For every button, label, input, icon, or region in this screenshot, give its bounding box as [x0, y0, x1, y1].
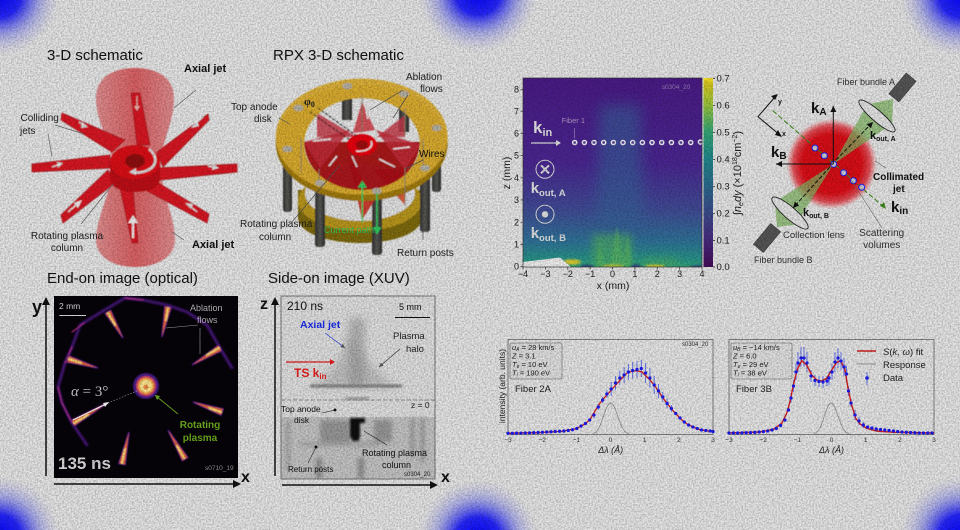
chart: Fiber 3B spectrum: = 29 eV	[740, 360, 769, 369]
labels: RPX schematic: φ	[304, 96, 311, 108]
chart: Fiber 3B spectrum: Fiber 3B	[736, 384, 772, 395]
chart: Fiber 2A spectrum: i	[517, 372, 519, 378]
tick labels: 0	[830, 437, 834, 444]
chart: Fiber 2A spectrum: = 190 eV	[518, 368, 550, 378]
axis tick labels: 0.0	[716, 262, 730, 273]
heatmap annotations: in	[542, 127, 553, 139]
lower cathode cup	[298, 190, 422, 243]
horizontal band	[310, 384, 402, 388]
chart: Fiber 3B spectrum: i	[738, 372, 740, 378]
geometry labels: y	[778, 99, 782, 106]
plot frame	[508, 340, 713, 434]
anode ring glow	[58, 298, 232, 445]
axis tick labels: 0.2	[716, 209, 730, 220]
labels: RPX schematic: disk	[254, 114, 273, 125]
legend: Data	[883, 373, 904, 384]
axis tick labels: 0	[514, 262, 519, 272]
response curve	[814, 403, 849, 434]
panel: side-on image: s0304_20	[404, 472, 431, 478]
panel: end-on image: α = 3°	[71, 384, 108, 400]
panel: end-on image: Rotating	[180, 420, 220, 431]
axis tick labels: 3	[677, 269, 682, 279]
tick labels: 1	[864, 437, 868, 444]
response curve	[593, 403, 629, 434]
heatmap annotations	[531, 118, 566, 244]
jet arrows	[52, 96, 219, 238]
axis frame and ticks	[520, 78, 715, 270]
collection cones	[775, 99, 893, 227]
collimated jet cross-section	[788, 120, 876, 208]
labels: RPX schematic: Wires	[419, 149, 445, 160]
heatmap annotations: out, A	[539, 188, 566, 199]
radial wire jets	[32, 93, 237, 243]
yellow base hot spots	[563, 260, 665, 268]
axis tick labels: 3	[514, 195, 519, 205]
labels: 3-D schematic	[19, 63, 235, 254]
lower dark region	[281, 417, 435, 479]
chart: density heatmap: z (mm)	[501, 157, 513, 189]
chart: density heatmap: (×10	[732, 165, 744, 187]
panel: side-on image: 5 mm	[399, 302, 422, 312]
image frame	[281, 296, 435, 479]
axis tick labels: 2	[655, 269, 660, 279]
labels: 3-D schematic: Rotating plasma	[31, 231, 104, 242]
axis tick labels: 1	[632, 269, 637, 279]
geometry labels: k	[771, 144, 779, 161]
tick labels: −2	[538, 437, 546, 444]
geometry labels: A	[819, 107, 827, 118]
axis tick labels: −1	[585, 269, 595, 279]
black image frame	[54, 296, 238, 478]
chart: density heatmap: Fiber 1	[562, 116, 585, 125]
axis tick labels: 8	[514, 84, 519, 94]
panel: end-on image: plasma	[183, 433, 218, 444]
labels: 3-D schematic: Colliding	[20, 113, 59, 124]
error bars	[594, 360, 671, 418]
chart: Fiber 2A spectrum: = 28 km/s	[520, 343, 555, 352]
labels: 3-D schematic: jets	[19, 126, 36, 137]
axis tick labels: 0.7	[716, 74, 730, 85]
tick labels: −3	[725, 437, 733, 444]
central rotating plasma	[133, 373, 159, 399]
ablation flow blades	[304, 102, 420, 220]
data points	[508, 368, 713, 433]
panel: side-on image: halo	[406, 344, 424, 355]
axes: end-on image	[32, 297, 250, 488]
current path arrows	[359, 182, 380, 233]
geometry labels: Collimated	[873, 172, 924, 183]
chart: Fiber 3B spectrum: Z = 6.0	[732, 352, 757, 360]
dark central column	[350, 418, 365, 441]
chart: density heatmap: dy	[732, 189, 744, 202]
heatmap annotations: k	[531, 225, 539, 242]
chart: density heatmap: −2	[732, 134, 739, 143]
labels: RPX schematic: flows	[420, 84, 443, 95]
heatmap annotations: k	[531, 180, 539, 197]
geometry labels: B	[779, 151, 787, 162]
legend: S(k, ω) fit	[883, 347, 924, 358]
panel: end-on image: 135 ns	[58, 454, 111, 473]
panel: end-on image	[54, 296, 238, 478]
chart: Fiber 3B spectrum	[725, 340, 936, 455]
axis tick labels: 0	[610, 269, 615, 279]
panel: side-on image: disk	[294, 415, 310, 425]
chart: density heatmap: s0304_20	[662, 84, 691, 91]
fit curve	[508, 371, 713, 433]
ablation flames	[67, 306, 223, 465]
panel: scattering geometry schematic: volumes	[863, 240, 900, 251]
labels: 3-D schematic: Axial jet	[192, 239, 235, 251]
panel: end-on image: s0710_19	[205, 465, 234, 472]
chart: Fiber 2A spectrum: intensity (arb. units)	[497, 349, 507, 423]
labels: 3-D schematic: column	[51, 243, 83, 254]
panel: side-on image: column	[382, 460, 411, 470]
geometry labels: k	[811, 100, 819, 117]
chart: Fiber 3B spectrum: e	[738, 364, 741, 370]
tick labels	[725, 437, 936, 444]
tick labels: −2	[759, 437, 767, 444]
axis title: Δλ (Å)	[818, 445, 844, 455]
geometry labels: in	[899, 206, 908, 217]
panel: side-on image: TS k	[294, 366, 319, 380]
chart: Fiber 2A spectrum: T	[512, 368, 519, 378]
axial jet hourglass	[96, 68, 175, 267]
fiber bundle B	[753, 223, 781, 253]
geometry labels: k	[870, 130, 876, 142]
chart: Fiber 2A spectrum: T	[512, 360, 520, 370]
geometry labels: x	[782, 131, 786, 138]
tick labels: 3	[932, 437, 936, 444]
heading: 3-D schematic: 3-D schematic	[47, 47, 143, 64]
labels: 3-D schematic: Axial jet	[184, 63, 227, 75]
parameter box	[731, 343, 792, 379]
wavevector arrows	[758, 95, 873, 208]
axis tick labels	[514, 74, 730, 279]
panel: scattering geometry schematic	[753, 73, 924, 265]
return post bodies	[283, 86, 441, 255]
panel: side-on image: Plasma	[393, 331, 425, 342]
chart: density heatmap: 18	[732, 157, 739, 165]
green streaks near base	[592, 234, 678, 267]
axis tick labels: 0.6	[716, 101, 730, 112]
angle phi0 lines	[310, 108, 358, 140]
axis tick labels: 0.1	[716, 236, 730, 247]
geometry labels: jet	[892, 184, 905, 195]
panel: side-on image: Axial jet	[300, 319, 341, 331]
heatmap annotations: out, B	[539, 233, 566, 244]
axis tick labels: 0.3	[716, 182, 730, 193]
z=0 dashed line	[281, 399, 435, 401]
axis tick labels: 4	[699, 269, 705, 279]
axis tick labels: 6	[514, 128, 519, 138]
chart: density heatmap	[501, 74, 745, 292]
chart: density heatmap: e	[738, 202, 745, 206]
panel: side-on image	[281, 296, 435, 479]
axis tick labels: 4	[514, 173, 519, 183]
labels: RPX schematic: Top anode	[231, 102, 278, 113]
lens A	[856, 96, 898, 136]
panel: side-on image: Return posts	[288, 465, 333, 474]
plot frame	[729, 340, 934, 434]
heading: RPX 3-D schematic: RPX 3-D schematic	[273, 47, 404, 64]
tick labels: −1	[573, 437, 580, 444]
panel: RPX 3-D schematic	[276, 79, 448, 255]
panel: end-on image: Ablation	[190, 303, 223, 313]
chart: Fiber 2A spectrum	[497, 340, 715, 455]
axes: end-on image: x	[241, 469, 250, 486]
axis titles: Δλ (Å)	[597, 445, 623, 455]
central rotating column	[347, 134, 377, 156]
chart: density heatmap: cm	[732, 143, 744, 157]
annotations: 210 ns	[287, 299, 323, 313]
fiber probe points	[573, 140, 703, 145]
axes: side-on image: z	[260, 296, 268, 313]
heatmap field	[523, 78, 706, 270]
chart: Fiber 2A spectrum: e	[517, 364, 520, 370]
panel: scattering geometry schematic: Fiber bundle A	[837, 77, 895, 87]
heading: side-on image: Side-on image (XUV)	[268, 270, 410, 287]
colorbar	[704, 78, 713, 267]
tick labels: 3	[711, 437, 715, 444]
fiber bundle A	[889, 73, 916, 102]
flow arrows	[313, 110, 410, 167]
panel: scattering geometry schematic: Fiber bundle B	[754, 255, 813, 265]
tick labels: 2	[677, 437, 681, 444]
chart: Fiber 2A spectrum: = 10 eV	[519, 360, 548, 369]
panel: end-on image: flows	[197, 315, 218, 325]
axis tick labels: 5	[514, 151, 519, 161]
target shadow	[523, 258, 571, 267]
chart: density heatmap: )	[732, 131, 744, 135]
axis tick labels: 7	[514, 106, 519, 116]
labels: RPX schematic: column	[259, 232, 291, 243]
labels: RPX schematic: Return posts	[397, 248, 454, 259]
tick labels: 0	[609, 437, 613, 444]
central plasma column	[110, 162, 160, 192]
data points	[729, 358, 932, 433]
axis tick labels: −2	[563, 269, 573, 279]
tick labels: 2	[898, 437, 902, 444]
chart: Fiber 2A spectrum: Fiber 2A	[515, 384, 552, 395]
panel: side-on image: Top anode	[281, 404, 321, 414]
post caps	[282, 83, 442, 194]
chart: Fiber 2A spectrum: A	[515, 347, 520, 353]
labels: RPX schematic: Ablation	[406, 72, 442, 83]
panel: side-on image: in	[319, 372, 327, 381]
axes: end-on image: y	[32, 297, 42, 317]
chart: Fiber 2A spectrum: u	[512, 343, 520, 353]
labels: RPX schematic: 0	[311, 100, 315, 109]
lens B	[768, 193, 812, 233]
panel: scattering geometry schematic: Scattering	[859, 228, 904, 239]
panel: side-on image: Rotating plasma	[362, 448, 427, 458]
parameter box	[510, 343, 562, 379]
labels: RPX schematic	[231, 72, 454, 259]
panel: scattering geometry schematic: Collection lens	[783, 230, 845, 241]
axis tick labels: 0.5	[716, 128, 730, 139]
axis tick labels: −3	[540, 269, 551, 279]
chart: Fiber 3B spectrum: = −14 km/s	[741, 343, 780, 352]
jet column	[596, 105, 644, 230]
panel: 3-D schematic	[32, 68, 237, 267]
axis tick labels: 0.4	[716, 155, 730, 166]
geometry labels: out, B	[809, 213, 829, 220]
axis tick labels: 2	[514, 217, 519, 227]
axes: side-on image	[260, 296, 450, 489]
scattering volumes	[812, 145, 865, 190]
chart: Fiber 2A spectrum: Z = 3.1	[511, 352, 536, 360]
labels: RPX schematic: Rotating plasma	[240, 219, 313, 230]
chart: Fiber 3B spectrum: B	[737, 347, 741, 353]
geometry labels	[771, 99, 924, 220]
panel: side-on image: z = 0	[411, 400, 430, 410]
labels: RPX schematic: Current path	[324, 225, 374, 235]
tick labels: −3	[504, 437, 512, 444]
geometry labels: out, A	[876, 136, 896, 143]
geometry labels: k	[891, 199, 899, 216]
axis titles: x (mm)	[597, 280, 629, 292]
chart: Fiber 3B spectrum: T	[733, 368, 740, 378]
error bars	[791, 347, 863, 428]
axis tick labels: −4	[518, 269, 528, 279]
chart: density heatmap: ∫n	[732, 206, 744, 215]
legend	[857, 347, 926, 385]
tick labels: 1	[643, 437, 647, 444]
axial jet column	[349, 318, 365, 386]
chart: Fiber 3B spectrum: = 38 eV	[739, 368, 767, 378]
axis tick labels: 1	[514, 240, 519, 250]
geometry labels: k	[803, 207, 809, 219]
plasma halo	[316, 336, 394, 390]
legend: Response	[883, 360, 926, 371]
heading: end-on image: End-on image (optical)	[47, 270, 198, 287]
tick labels: −1	[794, 437, 801, 444]
wires	[301, 95, 423, 205]
chart: Fiber 3B spectrum: u	[733, 343, 741, 353]
dark gaps at base	[579, 263, 702, 267]
probe beam dashed line	[773, 111, 885, 208]
tick labels	[504, 437, 715, 444]
fit curve	[729, 361, 934, 433]
axes: side-on image: x	[441, 469, 450, 486]
chart: Fiber 3B spectrum: T	[733, 360, 741, 370]
chart: Fiber 2A spectrum: s0304_20	[682, 342, 709, 348]
rotation arrow	[131, 149, 155, 173]
top anode disk	[276, 85, 448, 201]
heatmap annotations: k	[533, 118, 542, 137]
image annotations: 2 mm	[59, 301, 80, 311]
